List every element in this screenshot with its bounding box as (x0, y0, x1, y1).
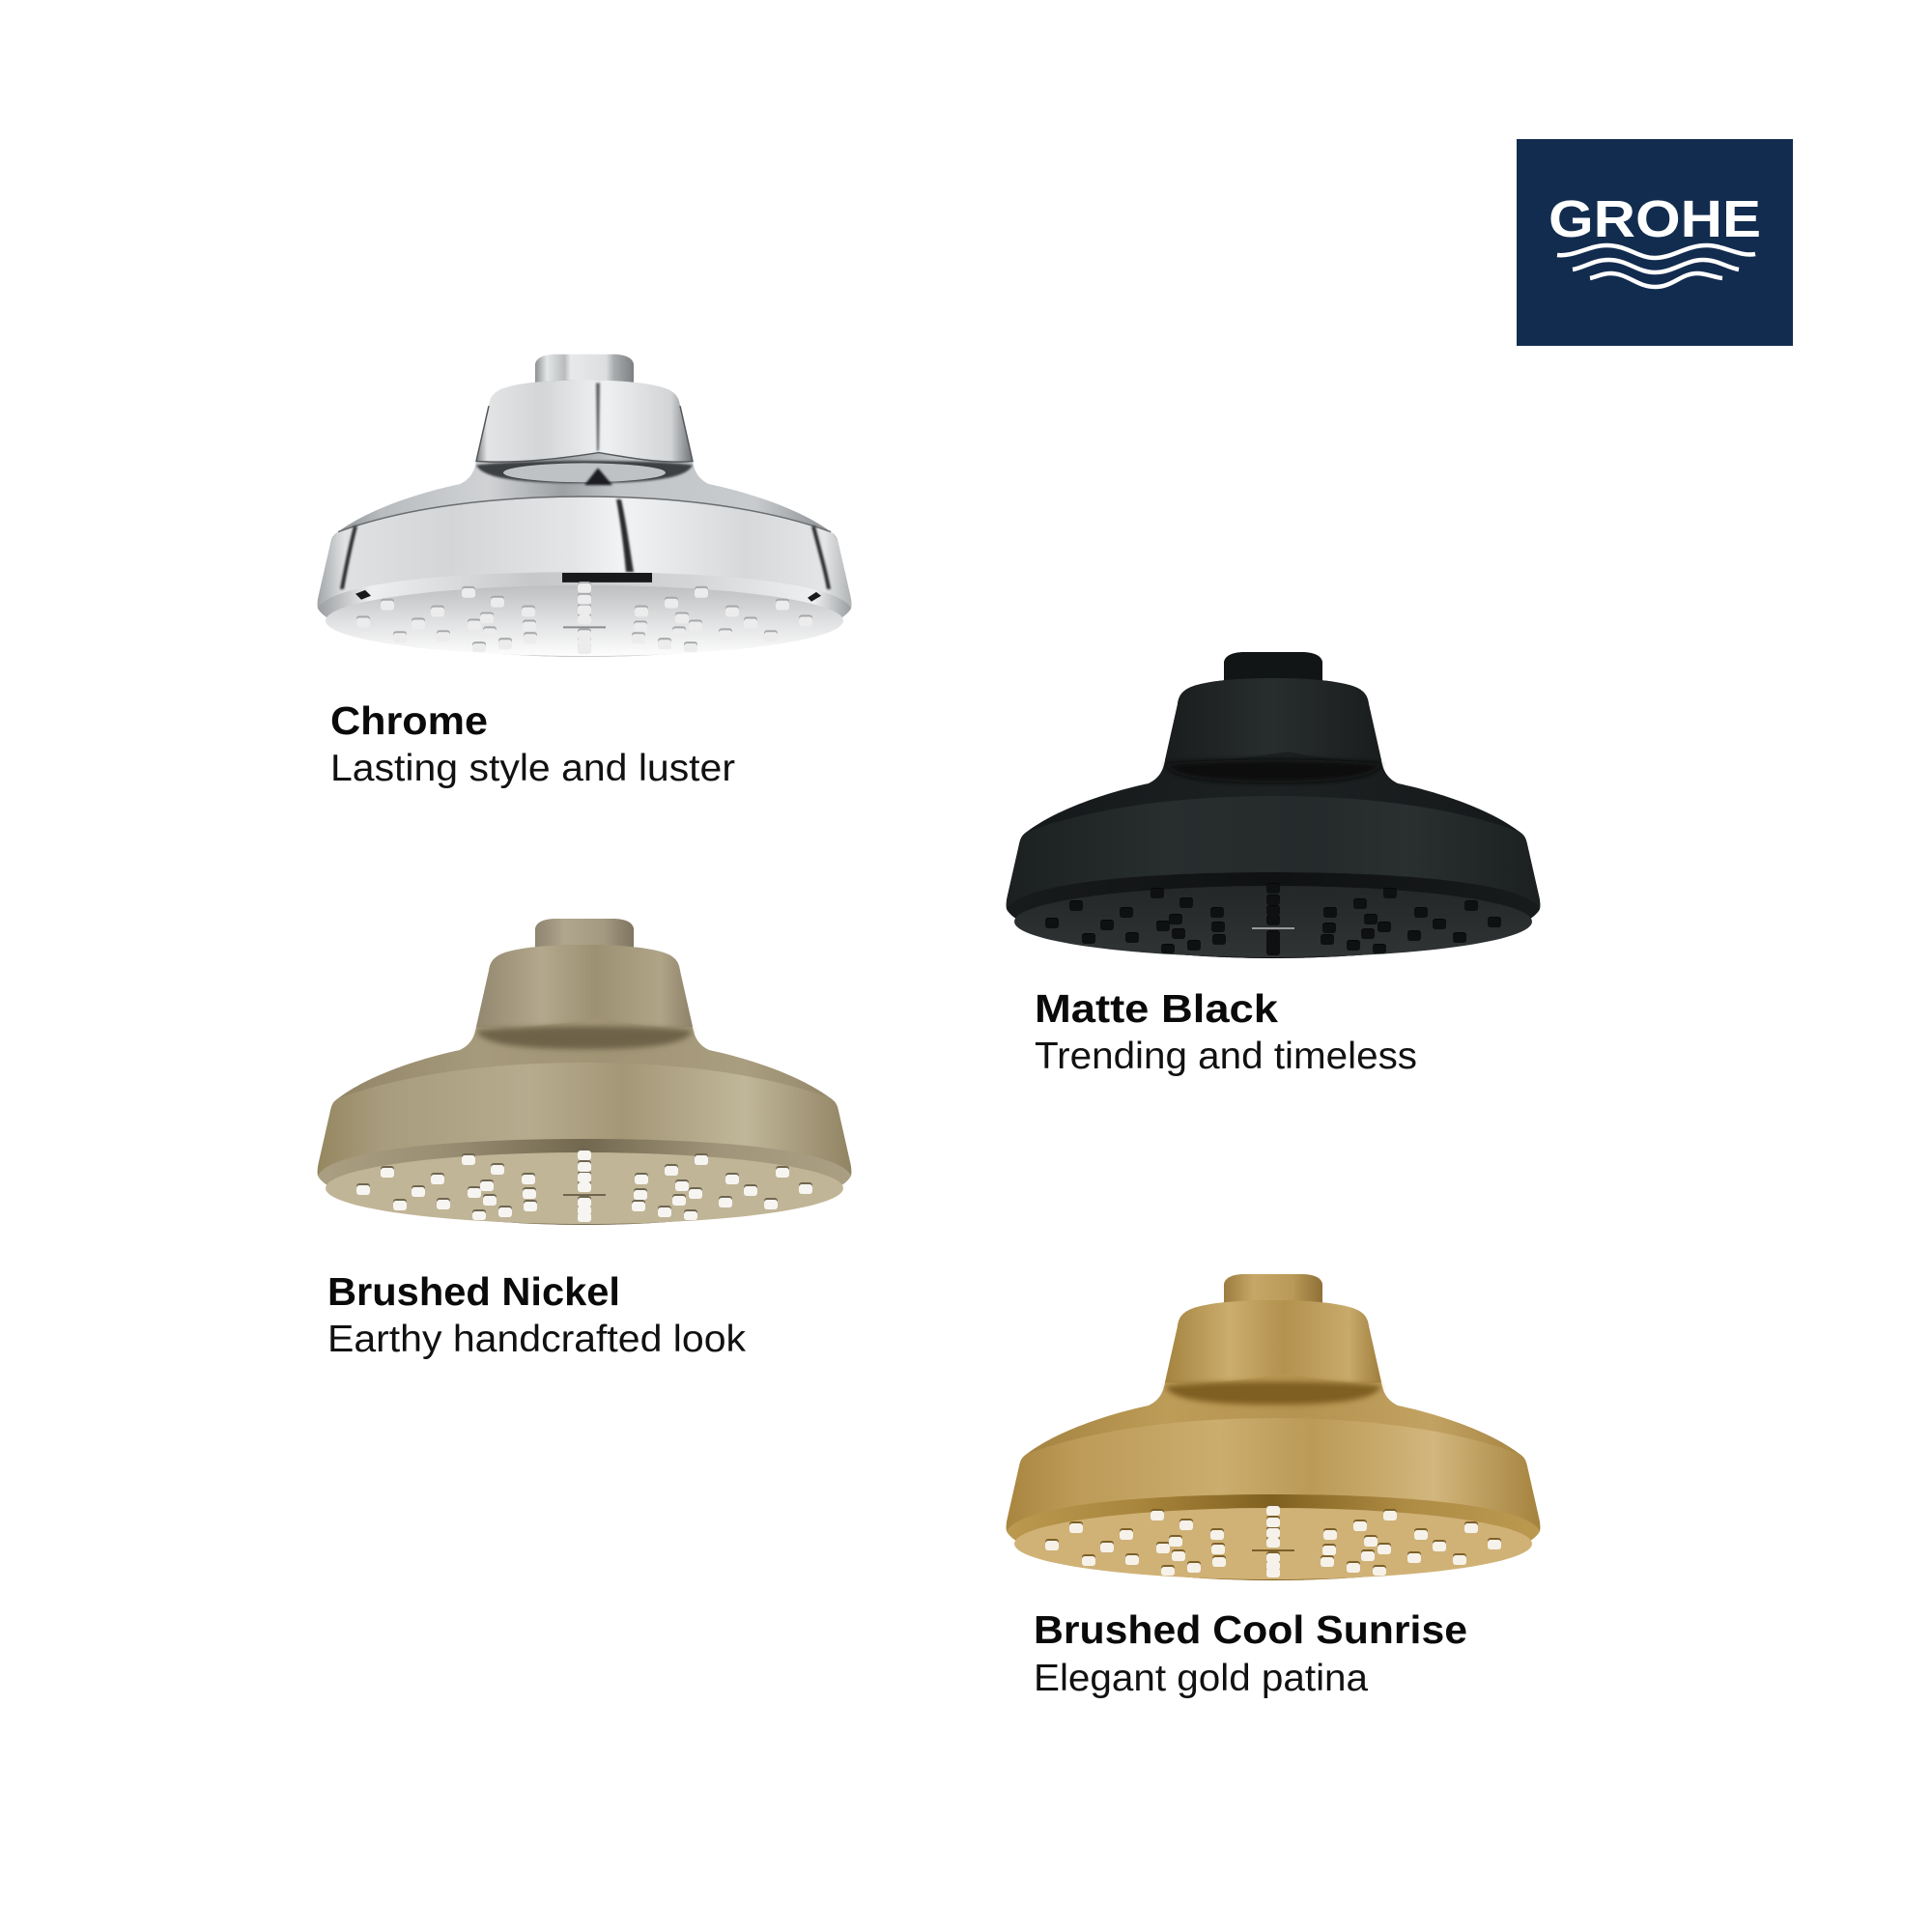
heading: Chrome: Chrome (330, 698, 488, 743)
heading: Brushed Cool Sunrise: Brushed Cool Sunrise (1034, 1607, 1467, 1652)
icon: brushed nickel shower head (318, 919, 851, 1225)
description: Brushed Cool Sunrise: Elegant gold patina (1034, 1658, 1368, 1699)
GROHE logo: GROHE (1548, 190, 1761, 248)
description: Chrome: Lasting style and luster (330, 748, 735, 789)
heading: Matte Black: Matte Black (1035, 986, 1278, 1031)
icon: brushed cool sunrise shower head (1007, 1274, 1540, 1580)
panel: matte black finish (1007, 652, 1540, 1077)
panel: brushed nickel finish (318, 919, 851, 1360)
GROHE logo (1517, 139, 1793, 346)
icon: chrome shower head (318, 355, 851, 657)
description: Brushed Nickel: Earthy handcrafted look (327, 1319, 747, 1360)
icon: matte black shower head (1007, 652, 1540, 958)
description: Matte Black: Trending and timeless (1035, 1036, 1417, 1077)
panel: brushed cool sunrise finish (1007, 1274, 1540, 1699)
heading: Brushed Nickel: Brushed Nickel (327, 1269, 620, 1314)
panel: chrome finish (318, 355, 851, 789)
